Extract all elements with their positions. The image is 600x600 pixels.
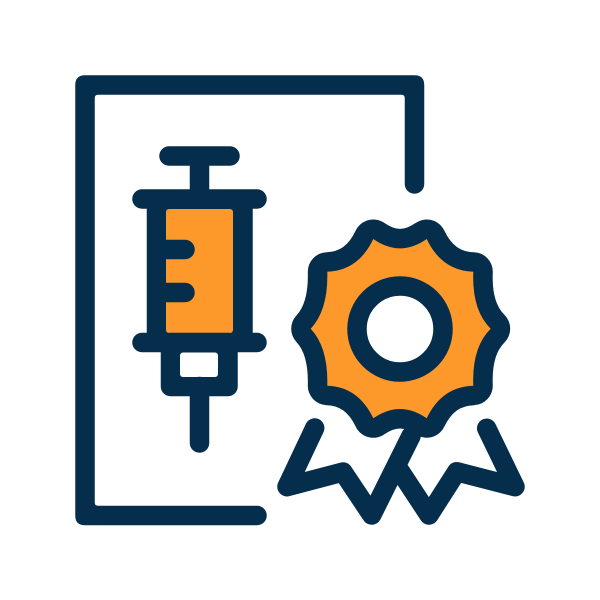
syringe liquid [166, 209, 233, 333]
syringe hub [170, 342, 228, 386]
syringe plunger [169, 156, 230, 199]
badge seal outline [311, 239, 491, 418]
syringe hub window [180, 352, 218, 377]
syringe measure ticks [160, 250, 185, 292]
syringe needle [190, 386, 209, 443]
badge ribbons [287, 428, 515, 515]
badge center ring [357, 286, 443, 372]
document outline [75, 75, 424, 525]
syringe barrel [142, 199, 257, 342]
badge seal fill [311, 239, 491, 418]
icon: award badge [287, 239, 515, 515]
icon: syringe [142, 156, 257, 443]
